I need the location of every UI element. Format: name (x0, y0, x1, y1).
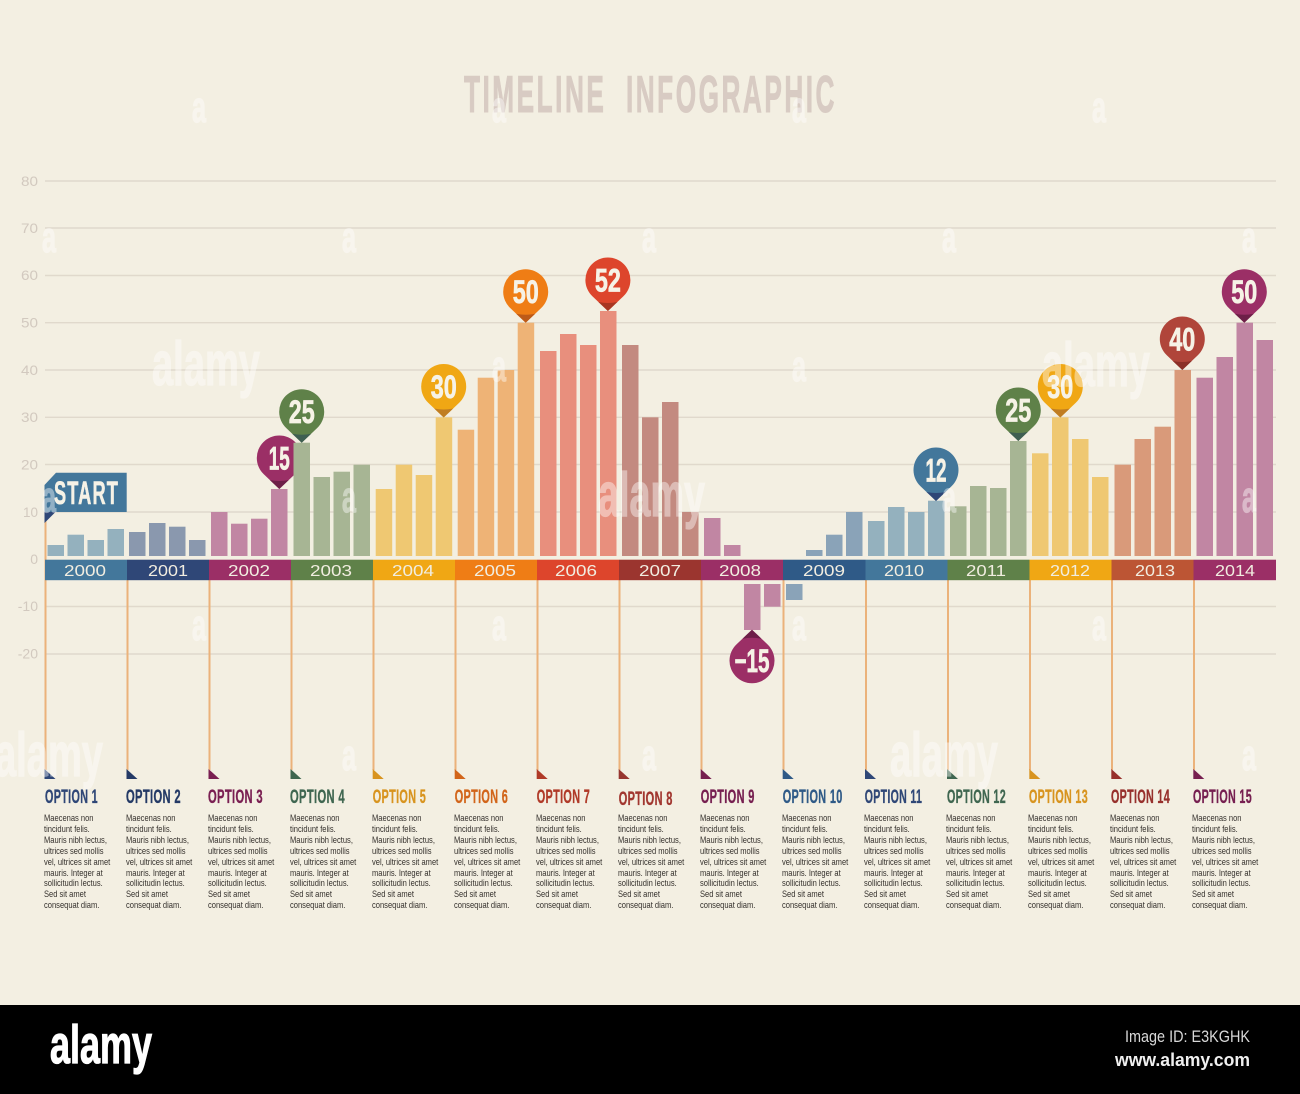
watermarks: a (42, 213, 56, 262)
text block: option 10: ultrices sed mollis (782, 845, 842, 856)
text block: option 6: ultrices sed mollis (454, 845, 514, 856)
text block: option 5: sollicitudin lectus. (372, 877, 431, 888)
text block: option 6: tincidunt felis. (454, 823, 500, 834)
text block: option 2: Mauris nibh lectus, (126, 834, 189, 845)
text block: option 9: Maecenas non (700, 812, 750, 823)
pin: 25: 25 (1005, 392, 1031, 428)
footer bar: www.alamy.com (1114, 1050, 1250, 1070)
pin: 25: 25 (289, 394, 315, 430)
y axis grid lines and labels: -10 (18, 598, 38, 614)
y axis grid lines and labels: 10 (23, 504, 38, 520)
text block: option 6: consequat diam. (454, 899, 509, 910)
text block: option 2: ultrices sed mollis (126, 845, 186, 856)
text block: option 12: Sed sit amet (946, 888, 988, 899)
text block: option 9: tincidunt felis. (700, 823, 746, 834)
option headings: OPTION 12 (947, 786, 1006, 808)
option headings: OPTION 6 (455, 786, 508, 808)
text block: option 2: consequat diam. (126, 899, 181, 910)
text block: option 9: vel, ultrices sit amet (700, 856, 766, 867)
year band: 2007 (639, 563, 681, 580)
text block: option 13: sollicitudin lectus. (1028, 877, 1087, 888)
text block: option 11: Mauris nibh lectus, (864, 834, 927, 845)
bars 2001 (129, 523, 206, 556)
watermarks: a (1242, 473, 1256, 522)
pin: 30 (1038, 364, 1083, 418)
y axis grid lines and labels: 20 (21, 456, 38, 472)
text block: option 12: sollicitudin lectus. (946, 877, 1005, 888)
bars 2000 (48, 529, 124, 556)
text block: option 7: vel, ultrices sit amet (536, 856, 602, 867)
bars 2010 with pin 12 (868, 447, 958, 556)
text block: option 15 (1192, 812, 1258, 910)
option headings (45, 786, 1252, 810)
text block: option 8: ultrices sed mollis (618, 845, 678, 856)
option headings: OPTION 13 (1029, 786, 1088, 808)
year band: 2010 (884, 563, 924, 580)
text block: option 12: Mauris nibh lectus, (946, 834, 1009, 845)
option flags (44, 769, 1204, 779)
y axis grid lines and labels: 50 (21, 314, 38, 330)
text block: option 8: Sed sit amet (618, 888, 660, 899)
option headings: OPTION 5 (373, 786, 426, 808)
text block: option 11: Sed sit amet (864, 888, 906, 899)
text block: option 15: mauris. Integer at (1192, 867, 1251, 878)
year band: 2006 (555, 563, 597, 580)
option headings: OPTION 8 (619, 788, 673, 810)
pin: 50: 50 (1231, 274, 1257, 310)
bars 2006 with pin 52 (540, 257, 630, 556)
text block: option 4: tincidunt felis. (290, 823, 336, 834)
watermarks: a (1242, 731, 1256, 780)
option headings: OPTION 14 (1111, 786, 1170, 808)
text block: option 6 (454, 812, 520, 910)
text block: option 4: ultrices sed mollis (290, 845, 350, 856)
text block: option 3: tincidunt felis. (208, 823, 254, 834)
text block: option 15: vel, ultrices sit amet (1192, 856, 1258, 867)
text block: option 9: mauris. Integer at (700, 867, 759, 878)
watermarks: a (192, 601, 206, 650)
text block: option 4: Mauris nibh lectus, (290, 834, 353, 845)
pin: -15: −15 (734, 643, 770, 679)
text block: option 10: consequat diam. (782, 899, 837, 910)
text block: option 2: Maecenas non (126, 812, 176, 823)
text block: option 4: Sed sit amet (290, 888, 332, 899)
y axis grid lines and labels: -20 (18, 646, 38, 662)
start flag: START (54, 475, 119, 511)
text block: option 7 (536, 812, 602, 910)
text block: option 5: Mauris nibh lectus, (372, 834, 435, 845)
text block: option 1: consequat diam. (44, 899, 99, 910)
text block: option 11: vel, ultrices sit amet (864, 856, 930, 867)
bars 2005 with pin 50 (458, 269, 548, 556)
text block: option 8: consequat diam. (618, 899, 673, 910)
watermarks: alamy (1042, 331, 1150, 400)
year band: 2001 (148, 563, 188, 580)
timeline connector lines (46, 510, 1194, 770)
pin: 50 (1222, 269, 1267, 323)
text block: option 14: tincidunt felis. (1110, 823, 1156, 834)
pin: 30 (421, 364, 466, 418)
text block: option 4 (290, 812, 356, 910)
text block: option 11: mauris. Integer at (864, 867, 923, 878)
watermarks: a (192, 83, 206, 132)
watermarks: a (42, 473, 56, 522)
text block: option 9: Mauris nibh lectus, (700, 834, 763, 845)
watermarks: a (492, 601, 506, 650)
watermarks: alamy (890, 721, 998, 790)
text block: option 12: mauris. Integer at (946, 867, 1005, 878)
watermarks: a (1092, 83, 1106, 132)
watermarks: a (642, 213, 656, 262)
y axis grid lines and labels: 0 (30, 551, 38, 567)
text block: option 2: tincidunt felis. (126, 823, 172, 834)
bars 2008 with pin -15 (704, 518, 780, 683)
text block: option 7: consequat diam. (536, 899, 591, 910)
option headings: OPTION 1 (45, 786, 98, 808)
footer bar: alamy (50, 1015, 152, 1075)
pin: 40: 40 (1169, 322, 1195, 358)
watermarks: a (942, 473, 956, 522)
text block: option 5: mauris. Integer at (372, 867, 431, 878)
text block: option 6: Sed sit amet (454, 888, 496, 899)
text block: option 14: Mauris nibh lectus, (1110, 834, 1173, 845)
option headings: OPTION 9 (701, 786, 755, 808)
watermarks: a (342, 213, 356, 262)
text block: option 1: mauris. Integer at (44, 867, 103, 878)
text block: option 12: tincidunt felis. (946, 823, 992, 834)
text block: option 5: consequat diam. (372, 899, 427, 910)
text block: option 15: sollicitudin lectus. (1192, 877, 1251, 888)
watermarks: a (792, 601, 806, 650)
text block: option 10: mauris. Integer at (782, 867, 841, 878)
text block: option 12 (946, 812, 1012, 910)
bars 2002 with pin 15 (211, 435, 302, 556)
year band: 2000 (64, 563, 106, 580)
text block: option 1: Mauris nibh lectus, (44, 834, 107, 845)
text block: option 13: tincidunt felis. (1028, 823, 1074, 834)
bars 2007 (622, 345, 698, 556)
text block: option 1: sollicitudin lectus. (44, 877, 103, 888)
text block: option 7: Mauris nibh lectus, (536, 834, 599, 845)
text block: option 11: consequat diam. (864, 899, 919, 910)
text block: option 11: ultrices sed mollis (864, 845, 924, 856)
start flag (44, 473, 127, 523)
text block: option 1: Sed sit amet (44, 888, 86, 899)
text block: option 5: tincidunt felis. (372, 823, 418, 834)
text block: option 4: consequat diam. (290, 899, 345, 910)
year band (45, 560, 1276, 580)
text block: option 6: mauris. Integer at (454, 867, 513, 878)
option headings: OPTION 11 (865, 786, 922, 808)
y axis grid lines and labels: 30 (21, 409, 38, 425)
text block: option 3: ultrices sed mollis (208, 845, 268, 856)
text block: option 12: vel, ultrices sit amet (946, 856, 1012, 867)
watermarks: a (942, 213, 956, 262)
text block: option 12: Maecenas non (946, 812, 996, 823)
pin: 30: 30 (1047, 369, 1073, 405)
text block: option 3: sollicitudin lectus. (208, 877, 267, 888)
text block: option 2: vel, ultrices sit amet (126, 856, 192, 867)
text block: option 9 (700, 812, 766, 910)
text block: option 9: Sed sit amet (700, 888, 742, 899)
text block: option 15: Maecenas non (1192, 812, 1242, 823)
option headings: OPTION 4 (290, 786, 345, 808)
y axis grid lines and labels: 70 (21, 220, 38, 236)
option headings: OPTION 7 (537, 786, 590, 808)
watermarks: alamy (152, 330, 260, 399)
text block: option 3: Sed sit amet (208, 888, 250, 899)
option headings: OPTION 2 (126, 786, 181, 808)
text block: option 11: Maecenas non (864, 812, 914, 823)
option headings: OPTION 3 (208, 786, 263, 808)
watermarks: a (492, 83, 506, 132)
text block: option 11: sollicitudin lectus. (864, 877, 923, 888)
text block: option 5: ultrices sed mollis (372, 845, 432, 856)
footer bar: Image ID: E3KGHK (1125, 1027, 1251, 1046)
year band: 2009 (803, 563, 845, 580)
text block: option 8: Mauris nibh lectus, (618, 834, 681, 845)
text block: option 2 (126, 812, 192, 910)
bars 2014 with pin 50 (1196, 269, 1273, 556)
pin: 52 (585, 257, 630, 311)
watermarks: a (642, 731, 656, 780)
text block: option 3: Maecenas non (208, 812, 258, 823)
text block: option 15: Sed sit amet (1192, 888, 1234, 899)
text block: option 6: sollicitudin lectus. (454, 877, 513, 888)
text block: option 5: vel, ultrices sit amet (372, 856, 438, 867)
text block: option 7: ultrices sed mollis (536, 845, 596, 856)
pin: 30: 30 (431, 369, 457, 405)
text block: option 5 (372, 812, 438, 910)
text block: option 13: ultrices sed mollis (1028, 845, 1088, 856)
watermarks: a (792, 83, 806, 132)
text block: option 8: vel, ultrices sit amet (618, 856, 684, 867)
text block: option 12: ultrices sed mollis (946, 845, 1006, 856)
year band: 2011 (966, 563, 1006, 580)
y axis grid lines and labels: 60 (21, 267, 38, 283)
pin: 25 (996, 387, 1041, 441)
text block: option 14: mauris. Integer at (1110, 867, 1169, 878)
text block: option 13 (1028, 812, 1094, 910)
text block: option 13: consequat diam. (1028, 899, 1083, 910)
text block: option 4: sollicitudin lectus. (290, 877, 349, 888)
text block: option 10: Sed sit amet (782, 888, 824, 899)
text block: option 10: sollicitudin lectus. (782, 877, 841, 888)
text block: option 1 (44, 812, 110, 910)
text block: option 15: consequat diam. (1192, 899, 1247, 910)
text block: option 9: consequat diam. (700, 899, 755, 910)
text block: option 2: sollicitudin lectus. (126, 877, 185, 888)
text block: option 14: Sed sit amet (1110, 888, 1152, 899)
watermarks: a (1242, 213, 1256, 262)
text block: option 11 (864, 812, 930, 910)
text block: option 11: tincidunt felis. (864, 823, 910, 834)
y axis grid lines and labels: 80 (21, 173, 38, 189)
text block: option 6: vel, ultrices sit amet (454, 856, 520, 867)
year band: 2008 (719, 563, 761, 580)
text block: option 7: mauris. Integer at (536, 867, 595, 878)
text block: option 13: vel, ultrices sit amet (1028, 856, 1094, 867)
text block: option 14: vel, ultrices sit amet (1110, 856, 1176, 867)
pin: 12: 12 (926, 452, 946, 488)
year band: 2003 (310, 563, 352, 580)
text block: option 10: Mauris nibh lectus, (782, 834, 845, 845)
y axis grid lines and labels: 40 (21, 362, 38, 378)
watermarks (0, 83, 1256, 790)
text block: option 8: tincidunt felis. (618, 823, 664, 834)
y axis grid lines and labels (18, 173, 1276, 662)
text block: option 1: tincidunt felis. (44, 823, 90, 834)
text block: option 8: sollicitudin lectus. (618, 877, 677, 888)
text block: option 1: ultrices sed mollis (44, 845, 104, 856)
text block: option 10 (782, 812, 848, 910)
text block: option 6: Mauris nibh lectus, (454, 834, 517, 845)
text block: option 1: vel, ultrices sit amet (44, 856, 110, 867)
year band: 2005 (474, 563, 516, 580)
year band: 2014 (1215, 563, 1255, 580)
text block: option 10: Maecenas non (782, 812, 832, 823)
footer bar (0, 1005, 1300, 1094)
watermarks: a (1092, 601, 1106, 650)
text block: option 13: Sed sit amet (1028, 888, 1070, 899)
text block: option 4: vel, ultrices sit amet (290, 856, 356, 867)
text block: option 12: consequat diam. (946, 899, 1001, 910)
year band: 2002 (228, 563, 270, 580)
year band: 2012 (1050, 563, 1090, 580)
pin: 52: 52 (595, 262, 621, 298)
text block: option 3: vel, ultrices sit amet (208, 856, 274, 867)
watermarks: a (792, 342, 806, 391)
watermarks: a (492, 342, 506, 391)
option headings: OPTION 15 (1193, 786, 1252, 808)
text block: option 2: mauris. Integer at (126, 867, 185, 878)
text block: option 2: Sed sit amet (126, 888, 168, 899)
text block: option 4: mauris. Integer at (290, 867, 349, 878)
bars 2003 with pin 25 (279, 389, 370, 556)
text block: option 14 (1110, 812, 1176, 910)
text block: option 3 (208, 812, 274, 910)
text block: option 10: tincidunt felis. (782, 823, 828, 834)
pin: 15: 15 (269, 440, 290, 476)
text block: option 14: ultrices sed mollis (1110, 845, 1170, 856)
watermarks: alamy (598, 461, 705, 530)
text block: option 4: Maecenas non (290, 812, 340, 823)
watermarks: alamy (0, 721, 103, 790)
pin: -15 (730, 630, 774, 683)
text block: option 8: mauris. Integer at (618, 867, 677, 878)
text block: option 5: Sed sit amet (372, 888, 414, 899)
text block: option 8: Maecenas non (618, 812, 668, 823)
text block: option 9: ultrices sed mollis (700, 845, 760, 856)
pin: 50 (503, 269, 548, 323)
text block: option 14: sollicitudin lectus. (1110, 877, 1169, 888)
text block: option 13: mauris. Integer at (1028, 867, 1087, 878)
title: TIMELINE INFOGRAPHIC (464, 66, 837, 124)
bars 2011 with pin 25 (950, 387, 1041, 556)
pin: 50: 50 (513, 274, 539, 310)
text block: option 15: tincidunt felis. (1192, 823, 1238, 834)
text block: option 7: tincidunt felis. (536, 823, 582, 834)
text block: option 13: Maecenas non (1028, 812, 1078, 823)
text block: option 5: Maecenas non (372, 812, 422, 823)
text block: option 14: consequat diam. (1110, 899, 1165, 910)
bars 2009 (786, 512, 862, 600)
bars 2013 with pin 40 (1114, 316, 1205, 556)
text block: option 14: Maecenas non (1110, 812, 1160, 823)
pin: 40 (1160, 316, 1205, 370)
watermarks: a (342, 731, 356, 780)
pin: 25 (279, 389, 324, 443)
text block: option 15: ultrices sed mollis (1192, 845, 1252, 856)
text block: option 15: Mauris nibh lectus, (1192, 834, 1255, 845)
bars 2012 with pin 30 (1032, 364, 1108, 556)
text block: option 13: Mauris nibh lectus, (1028, 834, 1091, 845)
option headings: OPTION 10 (783, 786, 843, 808)
text block: option 7: Sed sit amet (536, 888, 578, 899)
text block: option 6: Maecenas non (454, 812, 504, 823)
text block: option 7: sollicitudin lectus. (536, 877, 595, 888)
text block: option 3: Mauris nibh lectus, (208, 834, 271, 845)
year band: 2004 (392, 563, 434, 580)
bars 2004 with pin 30 (376, 364, 466, 556)
year band: 2013 (1135, 563, 1175, 580)
text block: option 10: vel, ultrices sit amet (782, 856, 848, 867)
watermarks: a (342, 473, 356, 522)
text block: option 3: mauris. Integer at (208, 867, 267, 878)
text block: option 3: consequat diam. (208, 899, 263, 910)
text block: option 1: Maecenas non (44, 812, 94, 823)
text block: option 7: Maecenas non (536, 812, 586, 823)
text block: option 9: sollicitudin lectus. (700, 877, 759, 888)
text block: option 8 (618, 812, 684, 910)
